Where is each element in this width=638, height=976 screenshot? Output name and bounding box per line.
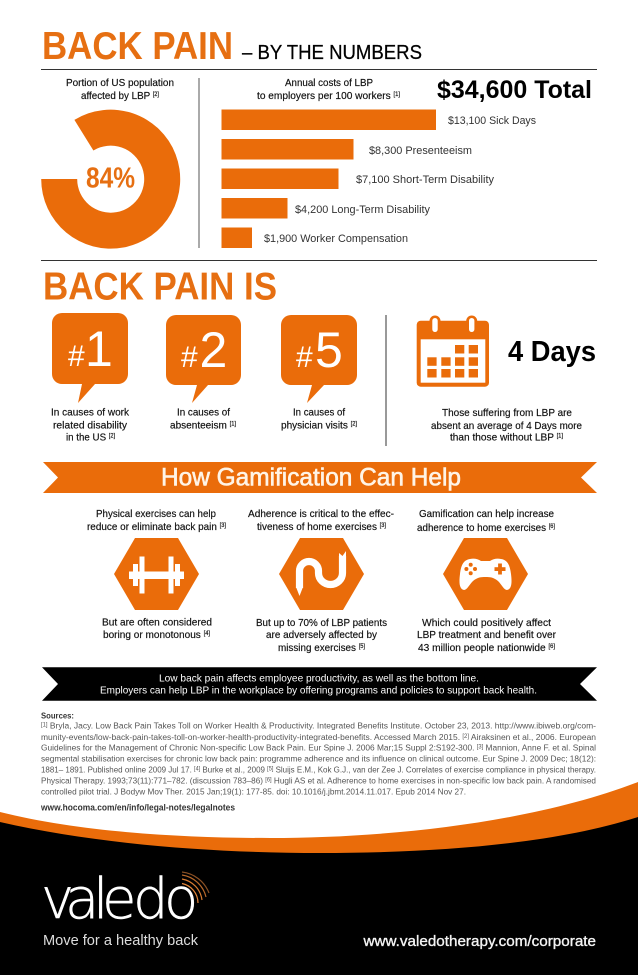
text: exercises can help: [3] — [220, 523, 226, 529]
text block: sources: Physical Therapy. 1993;73(11):771–782. (discussion 783–86) — [41, 775, 274, 785]
text: adherence is critical — [248, 508, 394, 533]
bar: long-term disability: $4,200 Long-Term Disability — [295, 204, 430, 216]
icon: calendar — [417, 316, 489, 387]
icon: game controller — [443, 538, 528, 610]
text block: sources: segmental stabilisation exercises for chronic low back pain: programme adherence and its influence on clinical outcome. Eur Spine J. 2009 Dec; 18(12): — [41, 754, 596, 764]
banner: how gamification can help: How Gamification Can Help — [161, 464, 461, 492]
icon: speech bubble number 2: 2 — [200, 322, 227, 378]
text: adherence is critical: Adherence is critical to the effec- — [248, 508, 394, 520]
logo: valedo: valedo — [41, 867, 198, 932]
banner: employee productivity message — [42, 667, 597, 701]
text block: sources: Airaksinen et al., 2006. European — [469, 732, 596, 742]
total cost: $34,600 Total — [437, 76, 592, 104]
icon: speech bubble number 5 — [281, 315, 357, 403]
text: positively affect treatment: LBP treatment and benefit over — [417, 629, 556, 641]
heading: annual costs of LBP: Annual costs of LBP — [285, 77, 373, 89]
text: positively affect treatment — [417, 617, 556, 654]
heading: portion of US population — [66, 77, 174, 102]
heading: annual costs of LBP — [257, 77, 400, 102]
black footer panel — [0, 817, 638, 975]
text block: sources: Mannion, Anne F. et al. Spinal — [483, 743, 596, 753]
icon: speech bubble number 1: 1 — [85, 321, 113, 377]
heading: portion of US population: [2] — [153, 92, 159, 98]
caption: work related disability: in the US — [66, 432, 109, 444]
bar: sick days — [222, 110, 536, 130]
bar: presenteeism: $8,300 Presenteeism — [369, 145, 472, 157]
icon: speech bubble number 5: # — [296, 341, 313, 374]
text block: sources: Guidelines for the Management of Chronic Non-specific Low Back Pain. Eur Spine J. 2006 Mar;15 Suppl 2:S192-300. — [41, 743, 487, 753]
heading: portion of US population: Portion of US population — [66, 77, 174, 89]
caption: work related disability: [2] — [109, 434, 115, 440]
panel: exercises column — [87, 508, 226, 641]
bar: presenteeism — [222, 139, 472, 160]
donut chart: 84 percent — [41, 110, 180, 249]
text block: sources: 1881– 1891. Published online 2009 Jul 17. — [41, 765, 203, 775]
icon: speech bubble number 2: # — [181, 341, 198, 374]
caption: absence description — [431, 407, 582, 444]
text block: sources: Bryla, Jacy. Low Back Pain Takes Toll on Worker Health & Productivity. Integrated Benefits Institute. October 23, 2013. http://www.ibiweb.org/com- — [48, 720, 596, 730]
icon: speech bubble number 5: 5 — [315, 322, 343, 378]
caption: physician visits: [2] — [351, 422, 357, 428]
text: adherence is critical: [3] — [380, 523, 386, 529]
caption: absence description: Those suffering from LBP are — [442, 407, 572, 419]
heading: annual costs of LBP: [1] — [394, 92, 400, 98]
caption: work related disability: In causes of work — [51, 406, 130, 418]
panel: portion of population — [41, 77, 180, 249]
website url: www.valedotherapy.com/corporate — [362, 934, 596, 950]
heading: portion of US population: affected by LBP — [81, 90, 155, 102]
panel: gamification column — [417, 508, 556, 654]
text: positively affect treatment: [6] — [549, 644, 555, 650]
caption: absenteeism: absenteeism — [170, 420, 230, 432]
text: gamification can help: adherence to home exercises — [417, 522, 555, 534]
orange swoosh — [0, 782, 638, 870]
caption: absence description: absent an average of 4 Days more — [431, 420, 582, 432]
banner: how gamification can help — [43, 462, 597, 493]
text: adherence is critical: tiveness of home exercises — [257, 521, 384, 533]
footer: black swoosh with brand — [0, 782, 638, 975]
text: gamification can help — [417, 508, 555, 534]
caption: physician visits: physician visits — [281, 420, 351, 432]
text: boring or monotonous: But are often considered — [102, 617, 212, 629]
icon: speech bubble number 1 — [52, 313, 128, 403]
text block: sources: Burke et al., 2009 — [200, 765, 267, 775]
text block: sources: Sources: — [41, 710, 74, 720]
icon: speech bubble number 2 — [166, 315, 241, 403]
text: missing exercises: missing exercises — [278, 642, 361, 654]
caption: work related disability: related disability — [53, 420, 128, 432]
text: boring or monotonous: [4] — [204, 631, 210, 637]
caption: physician visits: In causes of — [293, 406, 345, 418]
caption: absenteeism: In causes of — [177, 406, 230, 418]
text block: sources — [41, 710, 596, 796]
text block: sources: [3] — [477, 745, 484, 751]
caption: absenteeism: [1] — [230, 422, 236, 428]
caption: absence description: [1] — [557, 434, 563, 440]
bar chart: costs — [222, 110, 536, 248]
text: positively affect treatment: Which could positively affect — [422, 617, 551, 629]
bar: worker compensation: $1,900 Worker Compensation — [264, 233, 408, 245]
panel: adherence column — [248, 508, 394, 654]
text: boring or monotonous — [102, 617, 212, 641]
bar: short-term disability: $7,100 Short-Term Disability — [356, 174, 494, 186]
banner: employee productivity message: Low back pain affects employee productivity, as well as the bottom line. — [159, 673, 479, 685]
title: back pain by the numbers: – BY THE NUMBERS — [242, 41, 422, 64]
text: gamification can help: [6] — [549, 524, 555, 530]
text block: sources: [5] — [267, 767, 274, 773]
icon: speech bubble number 1: # — [68, 340, 85, 373]
panel: rank number 2 — [166, 315, 241, 432]
bar: short-term disability — [222, 168, 494, 189]
text: exercises can help: Physical exercises can help — [96, 508, 216, 520]
bar: worker compensation — [222, 228, 408, 248]
panel: rank number 1 — [51, 313, 130, 444]
panel: rank number 5 — [281, 315, 357, 432]
text: missing exercises — [256, 617, 387, 654]
caption: absence description: than those without LBP — [450, 432, 558, 444]
icon: winding path — [279, 538, 364, 610]
bar: sick days: $13,100 Sick Days — [448, 115, 536, 127]
text block: sources: [1] — [41, 722, 48, 728]
bar: long-term disability — [222, 198, 430, 218]
text: missing exercises: are adversely affected by — [266, 629, 378, 641]
caption: work related disability — [51, 406, 130, 444]
banner: employee productivity message: Employers can help LBP in the workplace by offering programs and policies to support back health. — [100, 685, 537, 697]
text: exercises can help — [87, 508, 226, 533]
text: legal notes link: www.hocoma.com/en/info/legal-notes/legalnotes — [40, 803, 235, 813]
text: missing exercises: But up to 70% of LBP patients — [256, 617, 387, 629]
text: exercises can help: reduce or eliminate back pain — [87, 521, 224, 533]
panel: annual costs — [222, 76, 592, 248]
stat: 4 days: 4 Days — [508, 336, 596, 368]
text block: sources: Sluijs E.M., Kok G.J., van der Zee J. Correlates of exercise compliance in physical therapy. — [273, 765, 596, 775]
text block: sources: [6] — [265, 777, 272, 783]
text block: sources: munity-events/low-back-pain-takes-toll-on-worker-health-productivity-integrated-benefits. Accessed March 2015. — [41, 732, 467, 742]
text block: sources: [4] — [194, 767, 201, 773]
heading: annual costs of LBP: to employers per 100 workers — [257, 90, 395, 102]
caption: absenteeism — [170, 406, 236, 432]
text: boring or monotonous: boring or monotonous — [103, 629, 205, 641]
text: positively affect treatment: 43 million people nationwide — [418, 642, 550, 654]
caption: physician visits — [281, 406, 357, 432]
heading: back pain is: BACK PAIN IS — [43, 266, 277, 308]
text: missing exercises: [5] — [359, 644, 365, 650]
text: gamification can help: Gamification can help increase — [419, 508, 554, 520]
text block: sources: controlled pilot trial. J Bodyw Mov Ther. 2015 Jan;19(1): 177-85. doi: 10.1016/j.jbmt.2014.11.017. Epub 2014 Nov 27. — [41, 786, 466, 796]
panel: 4 days absent — [417, 316, 596, 444]
title: back pain by the numbers: BACK PAIN — [42, 25, 233, 68]
text block: sources: [2] — [462, 734, 469, 740]
text block: sources: Hugli AS et al. Adherence to home exercises in non-specific low back pain. A randomised — [272, 775, 596, 785]
title: back pain by the numbers — [42, 25, 422, 68]
donut chart: 84 percent: 84% — [86, 162, 135, 194]
icon: dumbbell — [114, 538, 199, 610]
tagline: Move for a healthy back — [43, 933, 199, 949]
